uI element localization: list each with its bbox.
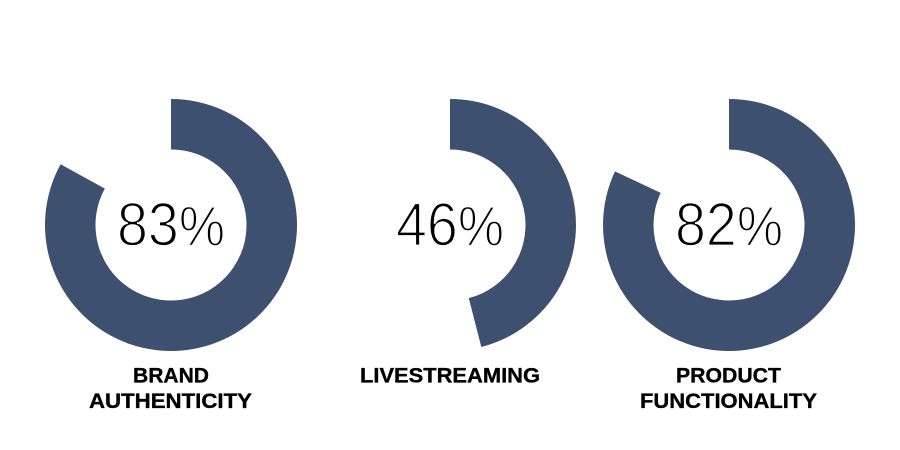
panel: product functionality <box>603 99 855 413</box>
label: brand authenticity <box>89 364 252 413</box>
label: livestreaming: LIVESTREAMING <box>360 364 540 388</box>
label: product functionality <box>640 364 817 413</box>
value: 83%: 83% <box>117 190 225 258</box>
panel: brand authenticity <box>45 99 297 413</box>
label: product functionality: FUNCTIONALITY <box>640 389 817 413</box>
label: product functionality: PRODUCT <box>676 364 781 388</box>
value: 82%: 82% <box>675 190 783 258</box>
panel: livestreaming <box>360 99 576 388</box>
value: 46%: 46% <box>396 190 504 258</box>
label: brand authenticity: AUTHENTICITY <box>89 389 252 413</box>
donut chart: 82% <box>603 99 855 351</box>
label: brand authenticity: BRAND <box>133 364 209 388</box>
donut chart: 83% <box>45 99 297 351</box>
donut chart: 46% <box>450 99 576 347</box>
